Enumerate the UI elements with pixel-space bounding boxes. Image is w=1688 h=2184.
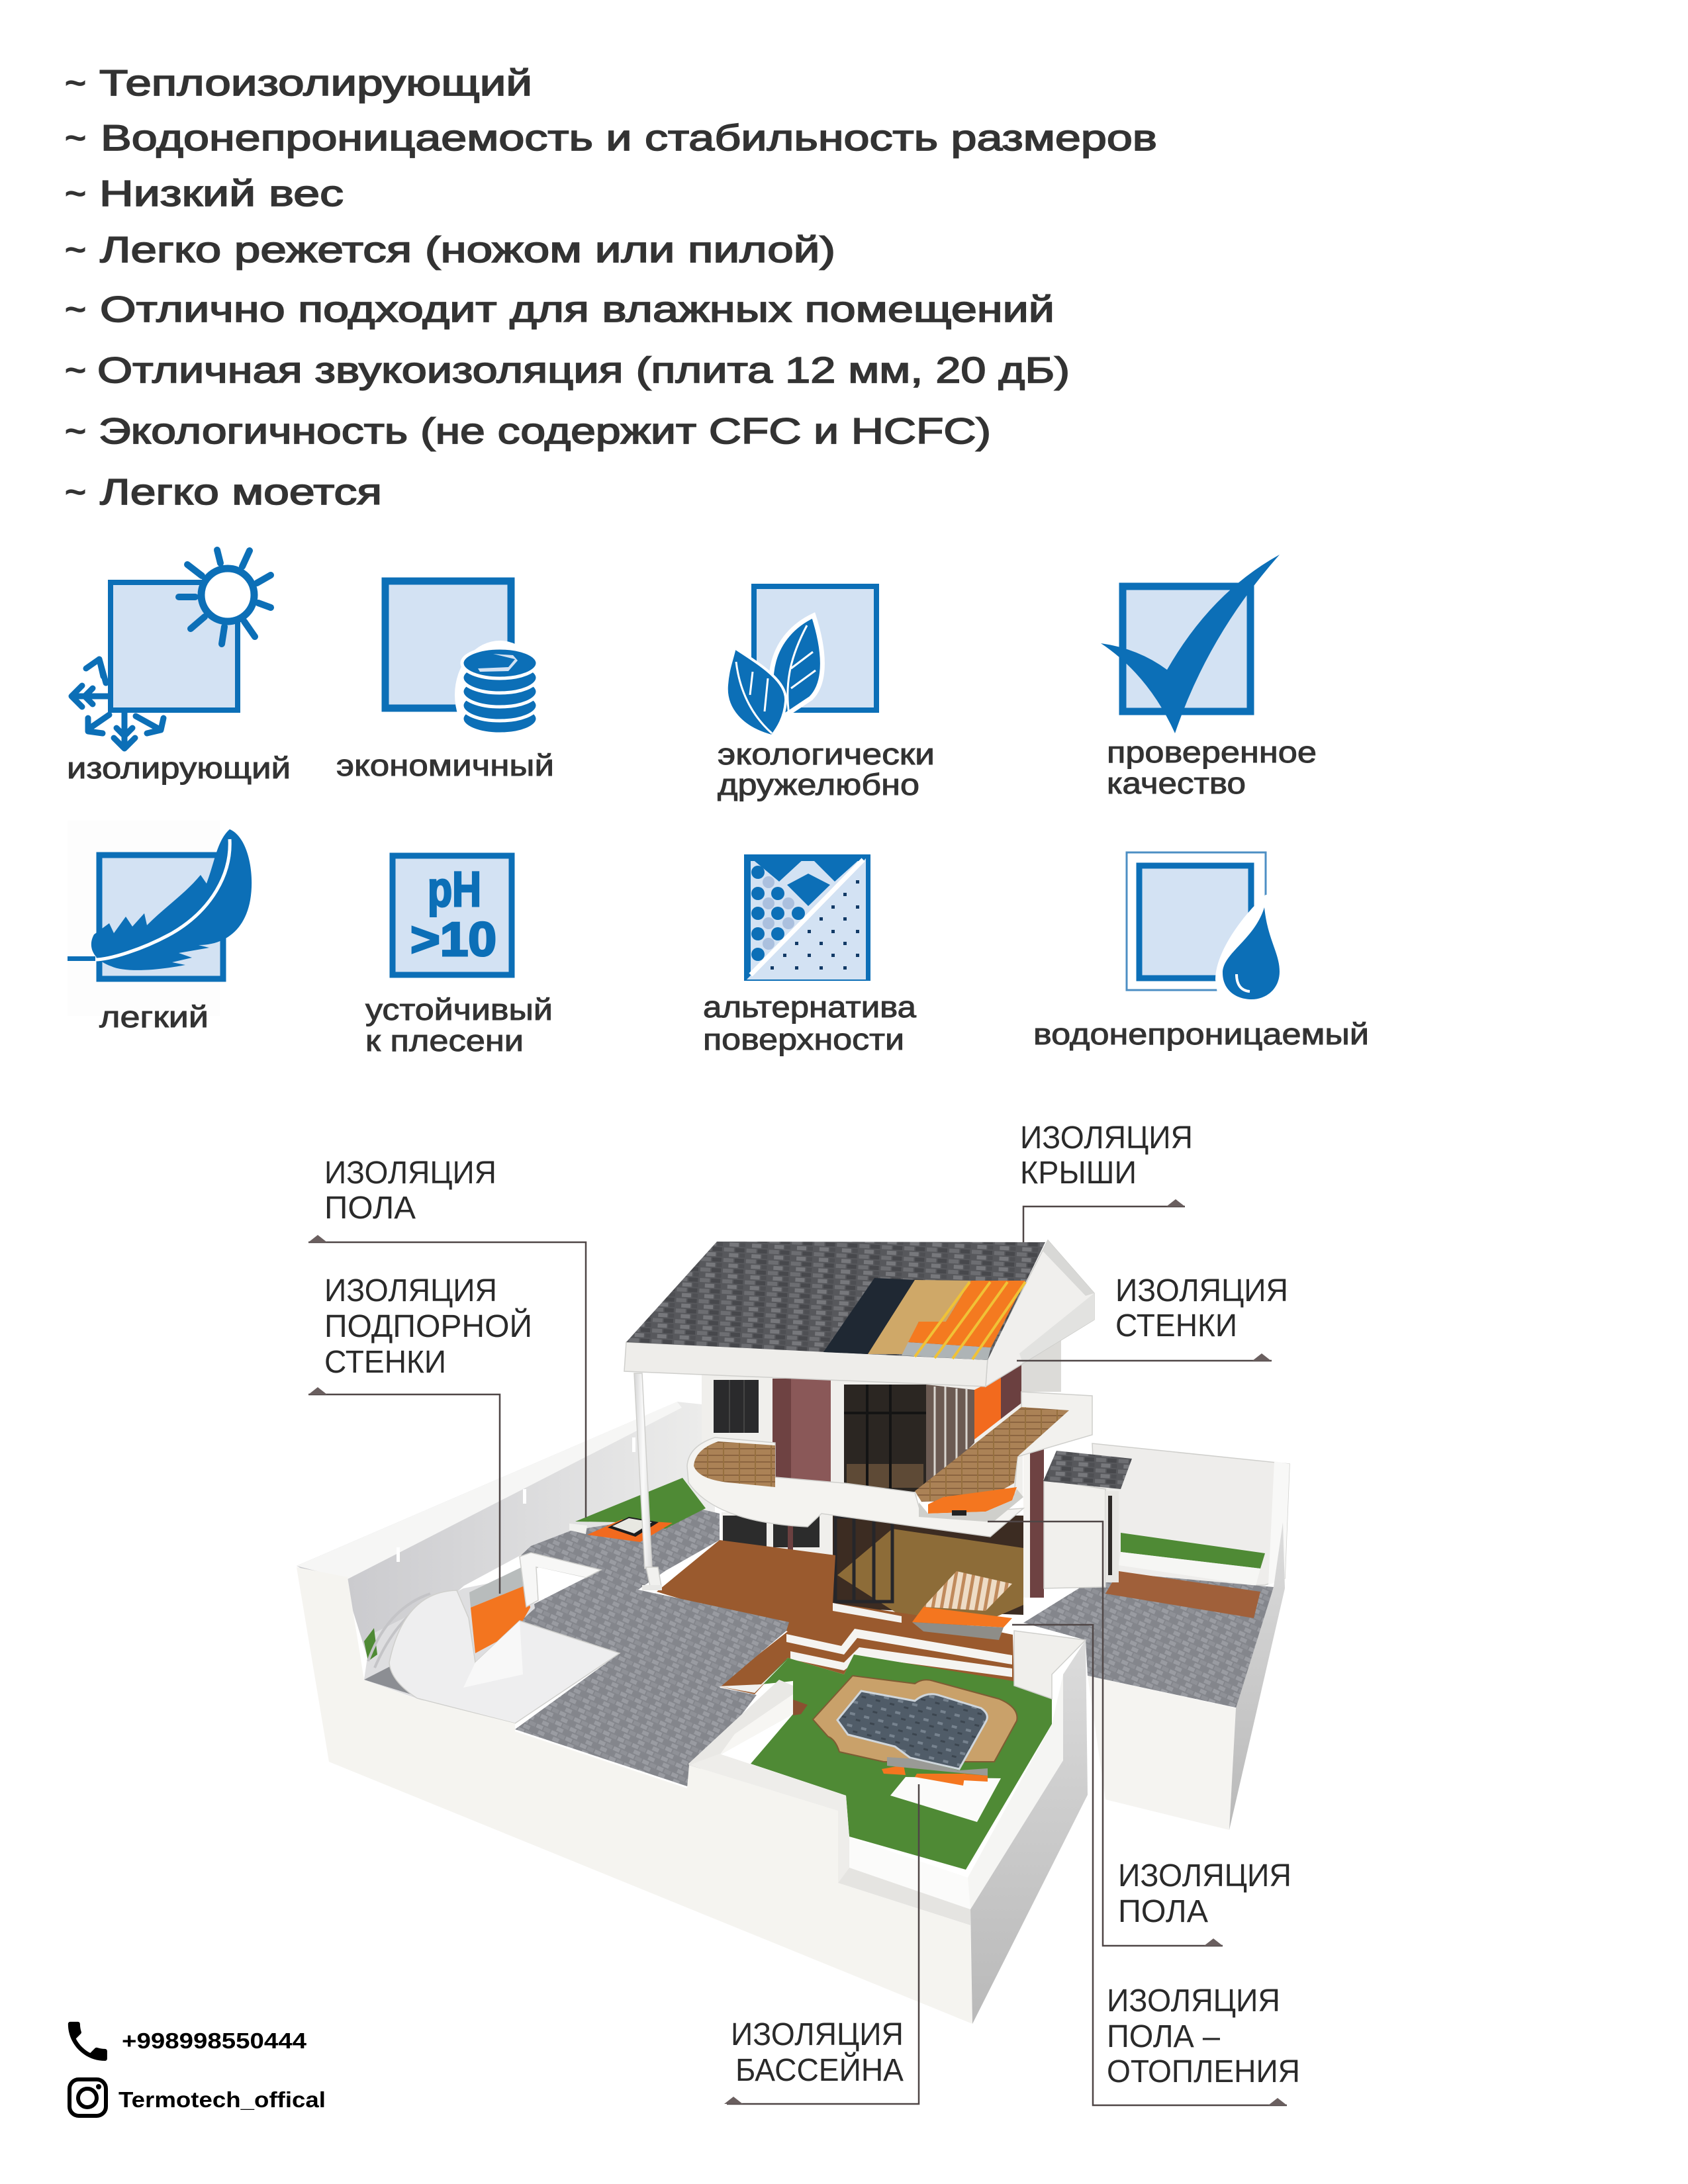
- icon: waterproof drop: [1127, 852, 1280, 1003]
- feature list: [65, 62, 1157, 512]
- callout: retaining wall insulation: СТЕНКИ: [324, 1345, 446, 1380]
- feature list: ~: [65, 173, 86, 214]
- right outer wall: [1088, 1522, 1285, 1830]
- left back wall: [297, 1402, 715, 1668]
- wood floor: [657, 1540, 1014, 1694]
- icon: insulating sun and snowflake: [71, 550, 271, 749]
- label: waterproof: водонепроницаемый: [1033, 1017, 1369, 1051]
- feature list: ~: [65, 62, 86, 103]
- icon: surface alternative: [747, 858, 867, 979]
- icon: instagram: [70, 2079, 106, 2116]
- label: eco friendly: дружелюбно: [718, 768, 919, 801]
- feature list: Легко режется (ножом или пилой): [100, 229, 835, 270]
- feature list: Водонепроницаемость и стабильность размеров: [101, 117, 1157, 158]
- feature list: ~: [65, 117, 86, 158]
- terrace walls: [688, 1631, 1088, 2024]
- callout: roof insulation: КРЫШИ: [1020, 1156, 1137, 1191]
- icon: phone: [68, 2022, 107, 2061]
- roof insulation cutaway: [823, 1278, 1025, 1360]
- big front wall: [297, 1567, 972, 2024]
- callout: floor insulation, right: ПОЛА: [1118, 1894, 1208, 1929]
- curved balcony deck: [694, 1441, 775, 1487]
- feature list: ~: [65, 349, 86, 390]
- upper floor wall: [702, 1334, 1061, 1497]
- feature list: Экологичность (не содержит CFC и HCFC): [99, 410, 991, 451]
- feature list: Отлично подходит для влажных помещений: [100, 289, 1055, 330]
- callout: floor insulation, left: ПОЛА: [324, 1191, 416, 1226]
- callout: retaining wall insulation: ИЗОЛЯЦИЯ: [324, 1273, 497, 1308]
- balcony section layers: [919, 1487, 1023, 1522]
- icon: pH resistance: >10: [410, 913, 496, 966]
- small porch roof: [1043, 1451, 1132, 1489]
- icon: light feather: [68, 821, 252, 1016]
- house illustration: [297, 1240, 1289, 2024]
- callout: wall insulation: ИЗОЛЯЦИЯ: [1115, 1273, 1288, 1308]
- right paving and deck: [1023, 1571, 1274, 1708]
- label: proven quality: проверенное: [1107, 735, 1317, 769]
- label: proven quality: качество: [1107, 766, 1246, 800]
- label: proven quality: [1107, 735, 1317, 800]
- callout: underfloor heating insulation: [1012, 1625, 1300, 2105]
- pool: [813, 1676, 1017, 1822]
- label: surface alternative: поверхности: [703, 1023, 904, 1056]
- label: eco friendly: экологически: [718, 737, 935, 771]
- callout: underfloor heating insulation: ИЗОЛЯЦИЯ: [1107, 1983, 1280, 2019]
- central paving: [515, 1510, 789, 1786]
- label: surface alternative: [703, 990, 917, 1056]
- feature list: ~: [65, 229, 86, 270]
- callout: wall insulation: [1017, 1273, 1288, 1361]
- feature list: Легко моется: [100, 471, 382, 512]
- callout: floor insulation, left: ИЗОЛЯЦИЯ: [324, 1156, 496, 1191]
- label: insulating: изолирующий: [67, 751, 291, 785]
- side walls of house: [1023, 1445, 1119, 1598]
- callout: wall insulation: СТЕНКИ: [1115, 1308, 1237, 1343]
- label: mold resistant: [365, 993, 553, 1058]
- phone number: +998998550444: [122, 2028, 307, 2053]
- icon: economical coins: [385, 581, 545, 749]
- icon: pH resistance: pH: [428, 862, 481, 917]
- right back wall: [1092, 1443, 1289, 1588]
- long balcony deck: [915, 1407, 1069, 1502]
- radiant floor section: [912, 1571, 1012, 1640]
- icon: eco leaves: [727, 586, 876, 736]
- roof gable: [986, 1240, 1094, 1387]
- left garden with skylight: [569, 1478, 706, 1542]
- icon: quality check mark: [1101, 555, 1280, 733]
- second floor slab with curved balcony: [687, 1437, 1023, 1537]
- feature list: Теплоизолирующий: [99, 62, 532, 103]
- callout: pool insulation: БАССЕЙНА: [735, 2052, 904, 2088]
- feature list: Низкий вес: [99, 173, 344, 214]
- callout: floor insulation, right: [988, 1522, 1291, 1946]
- feature list: ~: [65, 471, 86, 512]
- callout: underfloor heating insulation: ПОЛА –: [1107, 2019, 1220, 2054]
- left white bath and retaining wall insulation: [364, 1553, 620, 1723]
- feature list: Отличная звукоизоляция (плита 12 мм, 20 дБ): [97, 349, 1070, 390]
- roof fascia: [624, 1342, 988, 1387]
- icon: pH resistance: [393, 856, 512, 975]
- label: eco friendly: [718, 737, 935, 801]
- callout: floor insulation, left: [308, 1156, 586, 1518]
- label: economical: экономичный: [336, 749, 554, 782]
- terrace garden: [718, 1655, 1052, 1870]
- label: mold resistant: устойчивый: [365, 993, 553, 1026]
- label: surface alternative: альтернатива: [703, 990, 917, 1024]
- instagram handle: Termotech_offical: [118, 2087, 326, 2112]
- column: [634, 1373, 662, 1590]
- roof shingles: [626, 1242, 1045, 1360]
- label: mold resistant: к плесени: [365, 1024, 524, 1058]
- ground floor interior: [722, 1512, 1023, 1618]
- balcony parapet: [1014, 1392, 1092, 1496]
- feature list: ~: [65, 410, 86, 451]
- callout: roof insulation: [1020, 1120, 1193, 1242]
- callout: roof insulation: ИЗОЛЯЦИЯ: [1020, 1120, 1193, 1156]
- callout: pool insulation: [724, 1784, 919, 2104]
- feature list: ~: [65, 289, 86, 330]
- callout: underfloor heating insulation: ОТОПЛЕНИЯ: [1107, 2054, 1300, 2089]
- label: light: легкий: [99, 1000, 209, 1034]
- callout: retaining wall insulation: ПОДПОРНОЙ: [324, 1308, 532, 1344]
- callout: floor insulation, right: ИЗОЛЯЦИЯ: [1118, 1858, 1291, 1893]
- callout: retaining wall insulation: [308, 1273, 532, 1594]
- callout: pool insulation: ИЗОЛЯЦИЯ: [731, 2017, 904, 2052]
